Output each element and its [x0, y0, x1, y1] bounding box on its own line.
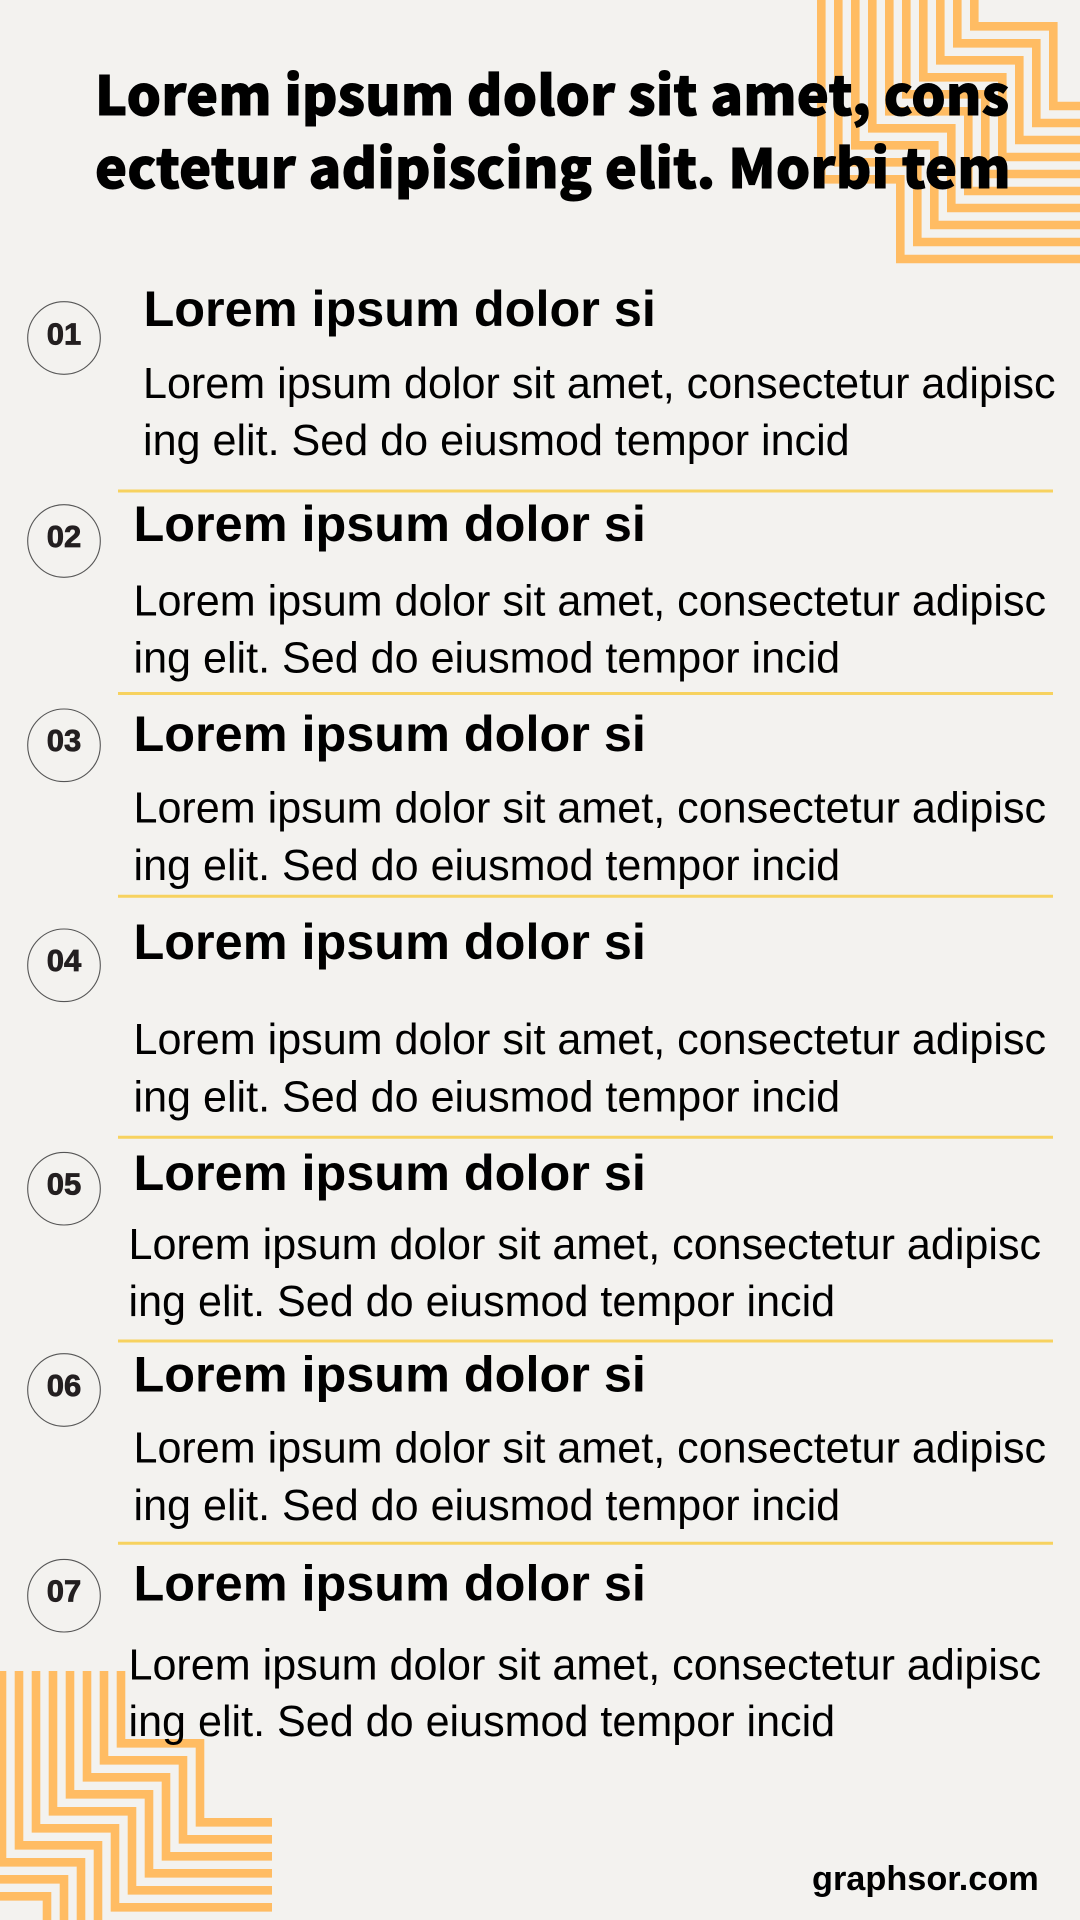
- body text 07: ing elit. Sed do eiusmod tempor incid: [128, 1698, 835, 1746]
- decorative stripe pattern: top right: [821, 0, 1080, 259]
- list item 07: [28, 1555, 1041, 1746]
- number badge 01: [28, 302, 100, 374]
- number badge 02: [28, 505, 100, 577]
- list item 04: [28, 913, 1046, 1121]
- title: Lorem ipsum dolor sit amet, cons: [95, 52, 1009, 131]
- number badge 05: [28, 1152, 100, 1225]
- list item 05: [28, 1144, 1041, 1326]
- body text 07: [128, 1641, 1041, 1746]
- number badge 01: 01: [47, 316, 81, 352]
- number badge 06: 06: [47, 1368, 81, 1403]
- number badge 07: [28, 1559, 100, 1632]
- body text 07: Lorem ipsum dolor sit amet, consectetur adipisc: [128, 1641, 1041, 1689]
- heading 07: Lorem ipsum dolor si: [134, 1555, 646, 1612]
- number badge 04: [28, 929, 100, 1002]
- number badge 04: 04: [47, 943, 82, 978]
- number badge 07: 07: [47, 1574, 81, 1609]
- title: [95, 52, 1011, 204]
- list item 06: [28, 1346, 1046, 1530]
- number badge 03: [28, 709, 100, 782]
- body text 03: Lorem ipsum dolor sit amet, consectetur adipisc: [134, 785, 1046, 833]
- list item 02: [28, 495, 1046, 683]
- body text 05: ing elit. Sed do eiusmod tempor incid: [128, 1278, 835, 1326]
- list item 01: [28, 280, 1056, 465]
- number badge 06: [28, 1354, 100, 1426]
- list item 03: [28, 705, 1046, 890]
- body text 01: Lorem ipsum dolor sit amet, consectetur adipisc: [143, 360, 1056, 408]
- body text 06: [134, 1425, 1046, 1530]
- heading 05: Lorem ipsum dolor si: [134, 1144, 646, 1201]
- body text 01: [143, 360, 1056, 465]
- body text 05: [128, 1221, 1041, 1326]
- heading 06: Lorem ipsum dolor si: [134, 1346, 646, 1403]
- number badge 03: 03: [47, 723, 81, 758]
- body text 02: Lorem ipsum dolor sit amet, consectetur adipisc: [134, 578, 1046, 626]
- number badge 02: 02: [47, 519, 81, 554]
- body text 06: ing elit. Sed do eiusmod tempor incid: [134, 1482, 840, 1530]
- body text 06: Lorem ipsum dolor sit amet, consectetur adipisc: [134, 1425, 1046, 1473]
- heading 03: Lorem ipsum dolor si: [134, 705, 646, 762]
- body text 02: ing elit. Sed do eiusmod tempor incid: [134, 635, 840, 683]
- body text 04: Lorem ipsum dolor sit amet, consectetur adipisc: [134, 1016, 1046, 1064]
- body text 04: ing elit. Sed do eiusmod tempor incid: [134, 1073, 840, 1121]
- title: ectetur adipiscing elit. Morbi tem: [95, 125, 1011, 204]
- heading 04: Lorem ipsum dolor si: [134, 913, 646, 970]
- body text 03: ing elit. Sed do eiusmod tempor incid: [134, 842, 840, 890]
- body text 02: [134, 578, 1046, 683]
- footer brand: graphsor.com: [812, 1860, 1039, 1898]
- number badge 05: 05: [47, 1166, 81, 1202]
- body text 01: ing elit. Sed do eiusmod tempor incid: [143, 417, 850, 465]
- heading 02: Lorem ipsum dolor si: [134, 495, 646, 552]
- body text 03: [134, 785, 1046, 890]
- decorative stripe pattern: bottom left: [0, 1671, 272, 1920]
- heading 01: Lorem ipsum dolor si: [144, 280, 656, 337]
- body text 04: [134, 1016, 1046, 1121]
- body text 05: Lorem ipsum dolor sit amet, consectetur adipisc: [128, 1221, 1041, 1269]
